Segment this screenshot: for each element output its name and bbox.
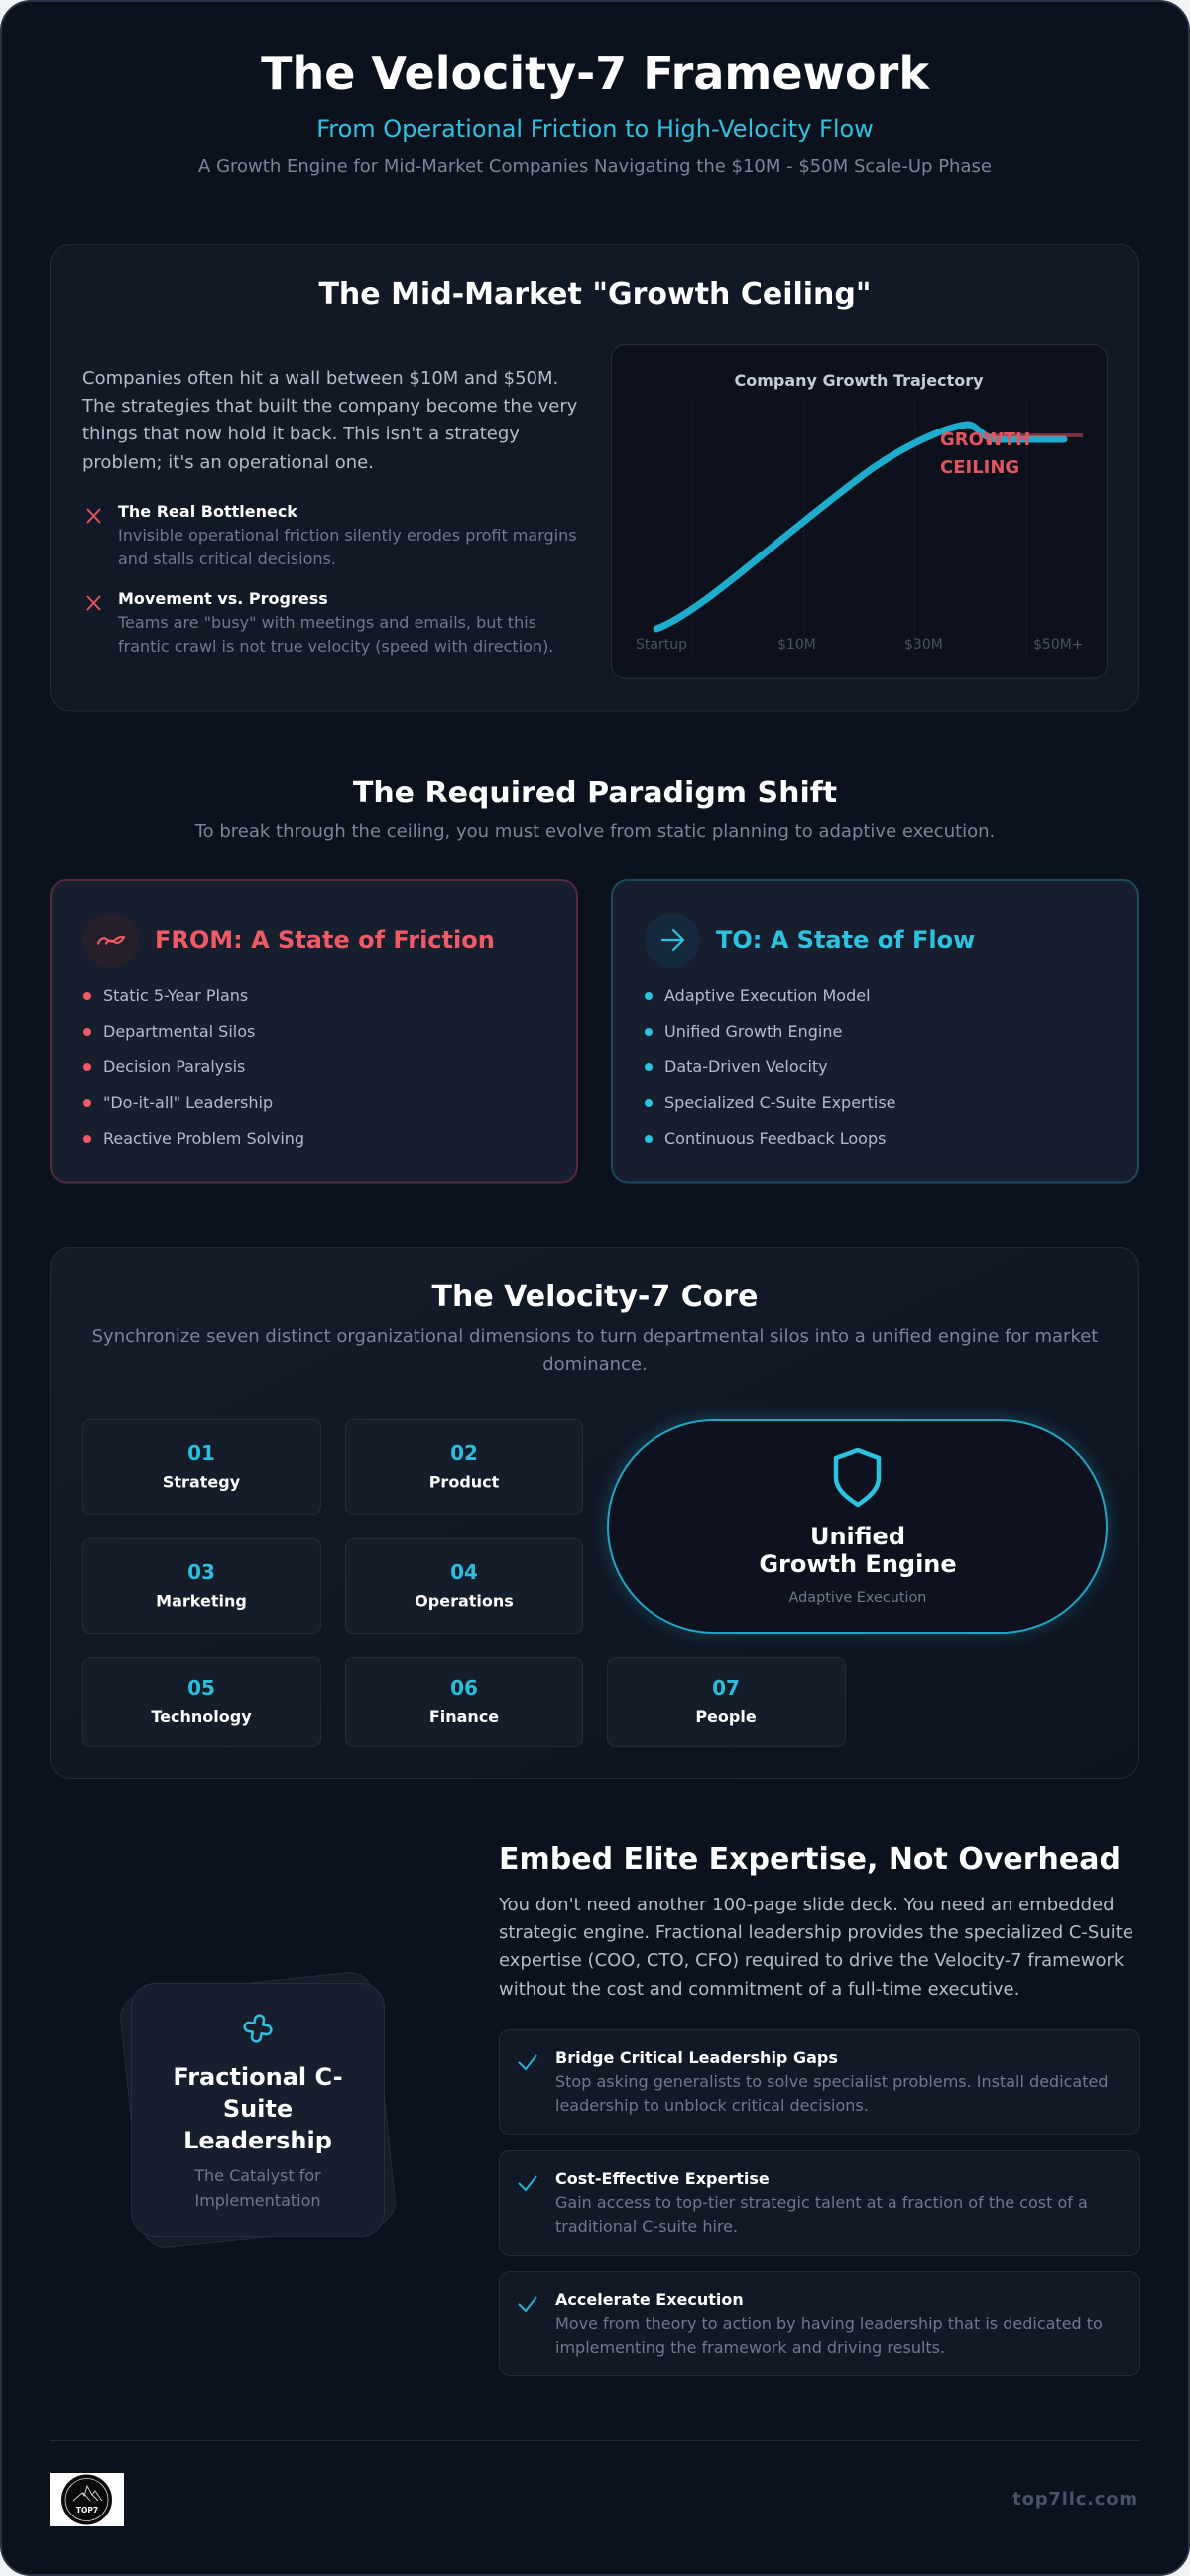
tile 01	[83, 1420, 321, 1514]
benefit: leadership gaps: Stop asking generalists to solve specialist problems. Install dedicated	[555, 2072, 1109, 2091]
tile 06	[345, 1658, 583, 1746]
friction list: Decision Paralysis	[103, 1057, 245, 1076]
card heading: Suite	[223, 2095, 293, 2123]
friction list: Static 5-Year Plans	[103, 986, 248, 1005]
text block: expertise intro: expertise (COO, CTO, CFO) required to drive the Velocity-7 framework	[499, 1950, 1125, 1971]
card heading	[173, 2063, 343, 2154]
icon: flow arrow	[645, 913, 700, 968]
tile 03	[83, 1539, 321, 1633]
tile 07: People	[695, 1707, 757, 1726]
icon: cross	[242, 2013, 274, 2044]
engine sublabel: Adaptive Execution	[789, 1590, 926, 1606]
panel: velocity-7 core	[50, 1248, 1138, 1778]
point: movement vs progress	[117, 589, 553, 656]
icon: check	[519, 2176, 536, 2190]
text block: growth ceiling intro: problem; it's an operational one.	[82, 452, 374, 473]
benefit: cost-effective: Gain access to top-tier strategic talent at a fraction of the cost of a	[555, 2193, 1088, 2212]
friction list: "Do-it-all" Leadership	[103, 1093, 273, 1112]
benefit: leadership gaps	[500, 2029, 1140, 2135]
core heading: The Velocity-7 Core	[432, 1280, 758, 1314]
benefit: leadership gaps: Bridge Critical Leadership Gaps	[555, 2048, 838, 2067]
tile 05	[83, 1658, 321, 1746]
unified growth engine pill	[608, 1419, 1107, 1633]
benefit: accelerate	[500, 2271, 1140, 2375]
tile 04	[345, 1539, 583, 1633]
tile 01: Strategy	[163, 1472, 241, 1492]
core description: Synchronize seven distinct organizational dimensions to turn departmental silos into a unified engine for market	[92, 1326, 1098, 1347]
card sublabel: The Catalyst for	[193, 2166, 321, 2185]
text block: growth ceiling intro	[81, 368, 578, 473]
card heading: Fractional C-	[173, 2063, 343, 2091]
logo: TOP7	[76, 2506, 98, 2515]
text block: expertise intro	[498, 1895, 1133, 2000]
axis labels	[636, 637, 1084, 653]
flow list: Specialized C-Suite Expertise	[664, 1093, 896, 1112]
tile 05: 05	[187, 1676, 215, 1700]
tagline: A Growth Engine for Mid-Market Companies Navigating the $10M - $50M Scale-Up Phase	[198, 156, 992, 177]
flow heading: TO: A State of Flow	[716, 926, 975, 954]
tile 03: 03	[187, 1560, 215, 1584]
growth ceiling label: CEILING	[940, 457, 1019, 478]
tile 07: 07	[712, 1676, 740, 1700]
tile 03: Marketing	[156, 1591, 247, 1611]
engine label: Unified	[810, 1523, 905, 1550]
flow list: Adaptive Execution Model	[664, 986, 871, 1005]
axis labels: $10M	[777, 637, 816, 653]
text block: expertise intro: strategic engine. Fractional leadership provides the specialized C-Suite	[499, 1922, 1133, 1943]
card sublabel	[193, 2166, 321, 2210]
point: the real bottleneck: The Real Bottleneck	[118, 502, 298, 521]
friction list: Departmental Silos	[103, 1022, 255, 1041]
text block: growth ceiling intro: Companies often hit a wall between $10M and $50M.	[82, 368, 558, 389]
text block: expertise intro: You don't need another 100-page slide deck. You need an embedded	[498, 1895, 1115, 1915]
text block: expertise intro: without the cost and commitment of a full-time executive.	[499, 1979, 1019, 2000]
flow list: Unified Growth Engine	[664, 1022, 842, 1041]
subtitle: From Operational Friction to High-Velocity Flow	[316, 115, 874, 143]
engine label	[759, 1523, 957, 1578]
friction list: Reactive Problem Solving	[103, 1129, 304, 1148]
point: the real bottleneck: Invisible operational friction silently erodes profit margins	[118, 526, 577, 545]
text block: growth ceiling intro: things that now hold it back. This isn't a strategy	[82, 424, 520, 444]
heading: paradigm shift	[194, 776, 995, 842]
card heading: Leadership	[183, 2127, 332, 2154]
chart title: Company Growth Trajectory	[734, 371, 984, 390]
core description	[92, 1326, 1098, 1375]
heading: growth ceiling: The Mid-Market "Growth Ceiling"	[318, 277, 872, 311]
title: The Velocity-7 Framework	[261, 47, 930, 100]
panel: growth ceiling	[50, 244, 1138, 711]
icon: shield	[836, 1450, 879, 1505]
logo	[50, 2473, 124, 2526]
tile 02: Product	[429, 1472, 500, 1492]
axis labels: $30M	[904, 637, 943, 653]
point: the real bottleneck: and stalls critical decisions.	[118, 550, 336, 568]
growth curve	[656, 425, 1064, 629]
axis labels: Startup	[636, 637, 687, 653]
icon: check	[519, 2297, 536, 2311]
tile 07	[607, 1658, 845, 1746]
subheading: To break through the ceiling, you must evolve from static planning to adaptive execution.	[194, 821, 995, 842]
engine label: Growth Engine	[759, 1550, 957, 1578]
text block: growth ceiling intro: The strategies that built the company become the very	[81, 396, 578, 417]
growth ceiling label	[940, 429, 1030, 478]
icon: x mark movement	[87, 596, 100, 610]
benefit: accelerate: Accelerate Execution	[555, 2290, 744, 2309]
friction list	[83, 986, 304, 1148]
point: the real bottleneck	[118, 502, 577, 568]
friction heading: FROM: A State of Friction	[155, 926, 495, 954]
benefit: cost-effective	[500, 2150, 1140, 2256]
growth ceiling label: GROWTH	[940, 429, 1030, 450]
benefit: cost-effective: traditional C-suite hire.	[555, 2217, 738, 2236]
header	[198, 47, 992, 177]
tile 06: 06	[450, 1676, 478, 1700]
icon: friction squiggle	[83, 913, 139, 968]
footer url: top7llc.com	[1012, 2489, 1138, 2510]
point: movement vs progress: frantic crawl is not true velocity (speed with direction).	[118, 637, 553, 656]
benefit: leadership gaps: leadership to unblock critical decisions.	[555, 2096, 869, 2115]
benefit: accelerate: implementing the framework and driving results.	[555, 2338, 945, 2357]
flow list: Data-Driven Velocity	[664, 1057, 828, 1076]
flow list: Continuous Feedback Loops	[664, 1129, 886, 1148]
tile 02: 02	[450, 1441, 478, 1465]
tile 01: 01	[187, 1441, 215, 1465]
point: movement vs progress: Teams are "busy" with meetings and emails, but this	[117, 613, 536, 632]
heading: embed elite expertise: Embed Elite Expertise, Not Overhead	[499, 1842, 1121, 1877]
card sublabel: Implementation	[194, 2191, 321, 2210]
tile 05: Technology	[151, 1707, 252, 1726]
tile 04: 04	[450, 1560, 478, 1584]
icon: check	[519, 2055, 536, 2069]
tile 06: Finance	[429, 1707, 499, 1726]
core description: dominance.	[542, 1354, 648, 1375]
icon: x mark bottleneck	[87, 509, 100, 523]
point: movement vs progress: Movement vs. Progress	[118, 589, 328, 608]
tile 02	[345, 1420, 583, 1514]
benefit: cost-effective: Cost-Effective Expertise	[555, 2169, 770, 2188]
benefit: accelerate: Move from theory to action by having leadership that is dedicated to	[555, 2314, 1103, 2333]
panel: flow	[612, 880, 1138, 1182]
chart: company growth trajectory	[611, 345, 1107, 678]
flow list	[645, 986, 896, 1148]
card: fractional c-suite	[118, 1970, 398, 2250]
tile 04: Operations	[415, 1591, 514, 1611]
panel: friction	[51, 880, 577, 1182]
heading: paradigm shift: The Required Paradigm Shift	[353, 776, 837, 810]
axis labels: $50M+	[1033, 637, 1084, 653]
ceiling line	[984, 433, 1083, 437]
